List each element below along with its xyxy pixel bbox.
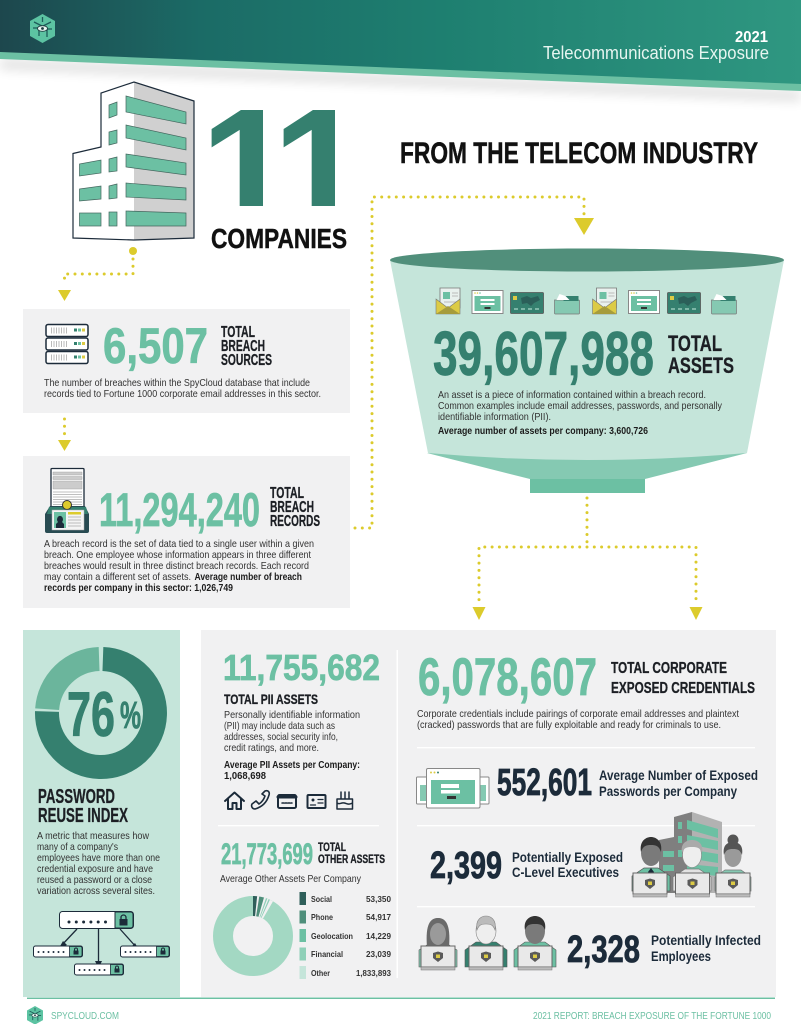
label: total breach records (270, 485, 320, 530)
legend: other assets: 54,917 (366, 912, 391, 922)
legend: other assets (300, 892, 391, 979)
funnel body (390, 260, 784, 460)
label: exposed executives: C-Level Executives (512, 865, 619, 880)
heading: password reuse index: REUSE INDEX (38, 805, 128, 827)
number: 6,078,607: 6,078,607 (418, 648, 597, 707)
percentage value: 76 (67, 680, 115, 750)
description: breach sources (44, 378, 321, 400)
block: corporate exposed credentials (417, 648, 755, 731)
label: total breach sources: TOTAL (221, 324, 255, 341)
legend: other assets: 14,229 (366, 931, 391, 941)
description: breach records: breach. One employee whose information appears in three different (44, 550, 311, 561)
description: credentials: Corporate credentials include pairings of corporate email addresses and plaintext (417, 709, 739, 720)
row: exposed passwords (416, 762, 758, 808)
arrow: building to breach sources (58, 247, 137, 301)
legend: other assets: Financial (311, 949, 343, 959)
description: breach records: breaches would result in three distinct breach records. Each record (44, 561, 309, 572)
description: breach records (44, 539, 314, 594)
illustration: employees at laptops (419, 916, 556, 970)
illustration: executives with building (632, 812, 751, 897)
panel: total breach records (23, 456, 350, 608)
icon: office building (73, 82, 194, 240)
average PII assets: 1,068,698 (224, 771, 266, 782)
legend: other assets: Phone (311, 912, 333, 922)
icon: server stack (46, 324, 88, 364)
block: total other assets (220, 838, 391, 979)
header year: 2021 (735, 29, 768, 46)
donut chart: other assets (223, 906, 283, 966)
description: PII: addresses, social security info, (224, 732, 338, 743)
label: exposed passwords: Average Number of Exposed (599, 767, 758, 783)
number: 6,507: 6,507 (103, 318, 208, 374)
description: assets: Average number of assets per company: 3,600,726 (438, 426, 648, 437)
legend: other assets: Social (311, 894, 332, 904)
number: 39,607,988: 39,607,988 (433, 320, 654, 389)
description: password reuse: credential exposure and have (37, 864, 153, 875)
legend: other assets: 1,833,893 (356, 968, 391, 978)
description: assets (438, 390, 723, 437)
label: exposed passwords: Passwords per Company (599, 783, 737, 799)
icon: login browser windows (416, 768, 489, 808)
label: total breach records: RECORDS (270, 513, 320, 530)
label: total breach records: TOTAL (270, 485, 304, 502)
big number: 11: 1 (272, 74, 367, 264)
number: 11,294,240: 11,294,240 (99, 483, 260, 536)
label: corporate exposed credentials: TOTAL CORPORATE (611, 660, 727, 677)
footer (27, 998, 775, 1024)
panel: lower right statistics (201, 630, 776, 997)
description: breach sources: The number of breaches within the SpyCloud database that include (44, 378, 310, 389)
description: password reuse: employees have more than one (37, 853, 160, 864)
label: infected employees: Potentially Infected (651, 933, 761, 948)
label: total assets: ASSETS (668, 353, 734, 378)
description: breach records: records per company in this sector: 1,026,749 (44, 583, 233, 594)
legend: other assets: Geolocation (311, 931, 353, 941)
label: corporate exposed credentials (611, 660, 755, 697)
donut chart: 76% (47, 659, 155, 767)
description: breach records: may contain a different set of assets. (44, 572, 191, 583)
footer website: SPYCLOUD.COM (51, 1011, 119, 1022)
description: breach records: Average number of breach (194, 572, 302, 583)
funnel: total assets (390, 248, 784, 493)
header title: Telecommunications Exposure (543, 43, 769, 63)
description: assets: An asset is a piece of information contained within a breach record. (438, 390, 706, 401)
label: infected employees: Employees (651, 949, 711, 964)
description: password reuse: variation across several sites. (37, 886, 155, 897)
description: breach sources: records tied to Fortune 1000 corporate email addresses in this sector. (44, 389, 321, 400)
average PII assets (224, 760, 360, 782)
heading: password reuse index (38, 786, 128, 827)
number: 552,601: 552,601 (497, 762, 592, 804)
label: total breach records: BREACH (270, 499, 314, 516)
label: total other assets: OTHER ASSETS (318, 852, 385, 866)
description: PII: (PII) may include data such as (224, 721, 335, 732)
description: PII: Personally identifiable information (224, 710, 360, 721)
label: total breach sources (221, 324, 272, 369)
funnel lower cone (427, 453, 747, 479)
label: total breach sources: BREACH (221, 338, 265, 355)
description: password reuse: many of a company's (37, 842, 118, 853)
label: total other assets (318, 840, 385, 866)
label: infected employees (651, 933, 761, 964)
label: exposed executives (512, 850, 623, 880)
average PII assets: Average PII Assets per Company: (224, 760, 360, 771)
description: credentials (417, 709, 739, 731)
description: breach records: A breach record is the set of data tied to a single user within a given (44, 539, 314, 550)
label: exposed executives: Potentially Exposed (512, 850, 623, 865)
legend: other assets: 53,350 (366, 894, 391, 904)
label: total other assets: TOTAL (318, 840, 346, 854)
icons: PII types (225, 791, 352, 809)
funnel neck (530, 479, 645, 493)
number: 21,773,699: 21,773,699 (221, 838, 313, 871)
label: total breach sources: SOURCES (221, 352, 272, 369)
label: corporate exposed credentials: EXPOSED CREDENTIALS (611, 680, 755, 697)
header band (0, 0, 801, 100)
description: password reuse: A metric that measures how (37, 831, 149, 842)
legend: other assets: 23,039 (366, 949, 391, 959)
logo: SpyCloud cube (30, 14, 55, 43)
footer logo (27, 1006, 43, 1024)
heading: password reuse index: PASSWORD (38, 786, 115, 808)
description: assets: Common examples include email addresses, passwords, and personally (438, 401, 723, 412)
big number: 11: 1 (200, 74, 295, 264)
legend: other assets: Other (311, 968, 331, 978)
subtitle: average other assets: Average Other Assets Per Company (220, 874, 362, 885)
label: total PII assets: TOTAL PII ASSETS (224, 692, 318, 707)
label: companies: COMPANIES (211, 223, 347, 254)
row: exposed executives (430, 812, 751, 897)
arrow: breach sources to breach records (58, 419, 71, 451)
arrow: funnel to lower section (472, 498, 702, 620)
funnel icons: asset types (436, 288, 736, 314)
description: password reuse: reused a password or a close (37, 875, 152, 886)
label: total assets (668, 331, 734, 378)
icon: record file tray (45, 468, 89, 533)
donut chart: 76%: % (120, 695, 141, 737)
number: 11,755,682: 11,755,682 (223, 647, 380, 688)
description: credentials: (cracked) passwords that are fully exploitable and ready for criminals to use. (417, 720, 721, 731)
block: total PII assets (223, 647, 380, 809)
description: PII: credit ratings, and more. (224, 743, 319, 754)
arrow: breach records to funnel (355, 197, 594, 528)
label: exposed passwords (599, 767, 758, 799)
number: 2,328: 2,328 (567, 929, 640, 971)
label: total assets: TOTAL (668, 331, 722, 356)
number: 2,399: 2,399 (430, 845, 502, 887)
icon: reused password boxes (34, 912, 170, 975)
row: infected employees (419, 916, 761, 971)
panel: total breach sources (23, 309, 350, 413)
description: PII (224, 710, 360, 754)
funnel rim (390, 248, 784, 272)
description: password reuse (37, 831, 160, 897)
description: assets: identifiable information (PII). (438, 412, 551, 423)
panel: password reuse index (23, 630, 180, 997)
